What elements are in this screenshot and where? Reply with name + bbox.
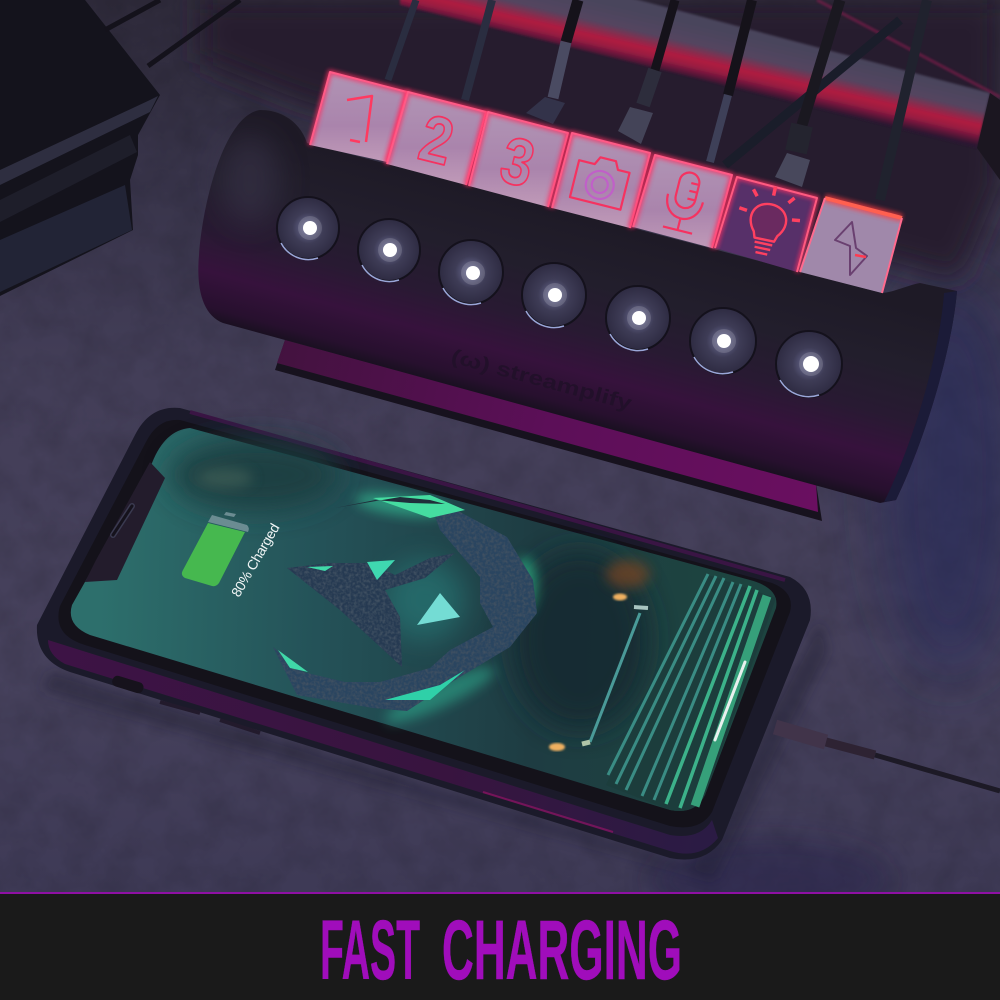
extra background cable: [725, 20, 900, 165]
hub buttons with white LEDs: [277, 197, 842, 397]
game logo artwork: [273, 489, 537, 731]
logo green glows: [354, 489, 446, 521]
phone screen: [71, 428, 776, 811]
cable 3 with plug: [526, 0, 578, 124]
button 1: [277, 197, 339, 260]
title: [320, 903, 682, 997]
purple top rim: [190, 412, 785, 580]
key 5: microphone: [633, 155, 732, 248]
key 6: light bulb: [715, 177, 817, 272]
key 2: [387, 92, 486, 185]
background: red lit metal tube: [400, 0, 1000, 180]
blue shaded end rim: [884, 291, 957, 502]
home bar: [715, 662, 745, 740]
phone shadow: [40, 620, 830, 880]
row of seven illuminated keys: [310, 72, 902, 293]
side port and buttons: [111, 675, 260, 733]
button 7: [776, 331, 842, 397]
title: FAST: [320, 903, 420, 997]
bright green accents: [373, 495, 465, 518]
key 1: [310, 72, 407, 162]
pink light on lower edge: [483, 792, 613, 832]
footer banner: [0, 892, 1000, 1000]
hub stand: [275, 340, 822, 521]
key 7: lightning bolt: [800, 198, 902, 293]
brand text on hub: (ω) streamplify: [449, 346, 635, 415]
smartphone: [37, 408, 811, 860]
button 3: [439, 240, 503, 305]
button 5: [606, 286, 670, 351]
charged label: 80% Charged: [228, 520, 283, 600]
lighter sheen at the left end: [220, 135, 280, 225]
cable 5: [710, 0, 752, 162]
battery icon: [182, 512, 249, 586]
key 2: 2: [413, 100, 461, 179]
logo arrow rock: [287, 553, 455, 667]
stairs artwork: [582, 574, 776, 811]
cable 1: [388, 0, 416, 80]
background: pink reflected line: [817, 0, 1000, 97]
key 3: 3: [494, 122, 542, 201]
phone notch: [85, 462, 165, 582]
title: CHARGING: [442, 903, 682, 997]
lamps in the wallpaper: [549, 594, 627, 751]
button 4: [522, 263, 586, 328]
cable 7: [880, 0, 927, 200]
inner bezel: [58, 420, 791, 827]
button 6: [690, 308, 756, 374]
button 2: [358, 219, 420, 282]
key 3: [469, 112, 568, 207]
key 4: camera: [552, 133, 650, 228]
cable 4 with plug: [618, 0, 675, 144]
background: dark surface behind the hub: [200, 0, 1000, 280]
cable 2: [465, 0, 492, 100]
USB charging cable: [775, 727, 1000, 791]
screen wallpaper: forest shades and glows: [170, 439, 650, 730]
purple lower band: [48, 640, 718, 854]
USB hub body: [198, 110, 957, 503]
charging cables entering keys: [388, 0, 927, 200]
centre triangle: [417, 593, 460, 625]
logo arc rock: [273, 503, 537, 711]
cable 6 with plug: [775, 0, 840, 187]
stack of dark devices, top left: [0, 0, 240, 296]
phone case: [37, 408, 811, 860]
